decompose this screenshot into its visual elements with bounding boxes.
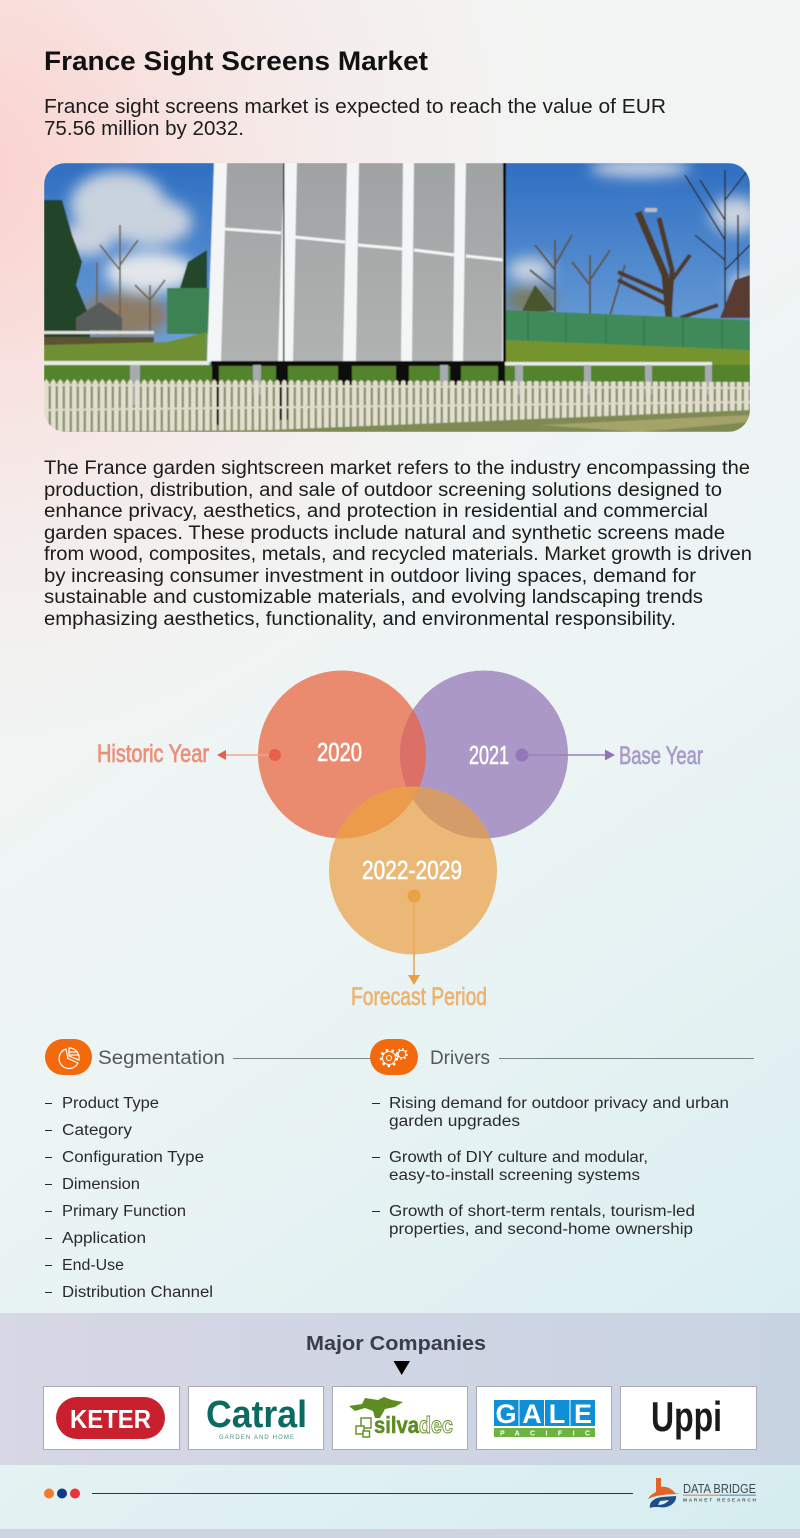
logo: Keter: KETER bbox=[70, 1404, 151, 1434]
forecast period callout bbox=[351, 890, 487, 1011]
drivers list: easy-to-install screening systems bbox=[389, 1167, 640, 1184]
description paragraph: The France garden sightscreen market refers to the industry encompassing the bbox=[44, 458, 750, 479]
logo: Catral: Catral bbox=[206, 1394, 307, 1436]
logo: Data Bridge Market Research: DATA BRIDGE bbox=[683, 1481, 756, 1496]
segmentation list bbox=[45, 1095, 213, 1301]
logo: Silvadec: dec bbox=[419, 1412, 453, 1438]
icon: gears bbox=[370, 1039, 418, 1075]
description paragraph: from wood, composites, metals, and recycled materials. Market growth is driven bbox=[44, 544, 752, 565]
logo: Gale Pacific: PACIFIC bbox=[500, 1430, 590, 1438]
description paragraph: sustainable and customizable materials, and evolving landscaping trends bbox=[44, 587, 703, 608]
drivers list: Rising demand for outdoor privacy and urban bbox=[389, 1095, 729, 1112]
segmentation list: Primary Function bbox=[62, 1203, 186, 1220]
segmentation list: Configuration Type bbox=[62, 1149, 204, 1166]
logo: Catral: GARDEN AND HOME bbox=[219, 1435, 294, 1441]
logo: Gale Pacific bbox=[476, 1386, 612, 1450]
venn diagram: timeline bbox=[97, 670, 703, 1011]
segmentation heading: Segmentation bbox=[98, 1048, 225, 1069]
logo: Gale Pacific: A bbox=[522, 1399, 542, 1429]
logo: Catral bbox=[188, 1386, 324, 1450]
year 2021: 2021 bbox=[469, 740, 509, 770]
description paragraph: garden spaces. These products include natural and synthetic screens made bbox=[44, 523, 725, 544]
drivers heading bbox=[370, 1039, 754, 1075]
base year callout: Base Year bbox=[619, 742, 703, 770]
logo: Data Bridge Market Research bbox=[648, 1478, 757, 1508]
logo: Uppi: Uppi bbox=[651, 1393, 722, 1440]
photo: sight screen on a sports ground bbox=[44, 159, 760, 432]
logo: Silvadec bbox=[332, 1386, 468, 1450]
logo: Gale Pacific: L bbox=[549, 1399, 565, 1429]
drivers list: Growth of short-term rentals, tourism-led bbox=[389, 1203, 695, 1220]
left trees bbox=[44, 200, 90, 345]
ground bbox=[63, 409, 750, 432]
base year callout bbox=[516, 742, 703, 770]
logo: Gale Pacific: G bbox=[495, 1399, 517, 1429]
logo: Data Bridge Market Research: MARKET RESEARCH bbox=[683, 1498, 757, 1504]
drivers list: garden upgrades bbox=[389, 1113, 520, 1130]
logo: Keter bbox=[44, 1386, 180, 1450]
footer bbox=[0, 1478, 800, 1538]
segmentation list: End-Use bbox=[62, 1257, 124, 1274]
right bare trees bbox=[530, 235, 625, 315]
forecast period callout: Forecast Period bbox=[351, 983, 487, 1011]
major companies heading: Major Companies bbox=[306, 1333, 486, 1355]
panel: major companies bbox=[0, 1313, 800, 1465]
description paragraph: emphasizing aesthetics, functionality, and environmental responsibility. bbox=[44, 609, 676, 630]
footer dots bbox=[44, 1488, 80, 1498]
drivers list: Growth of DIY culture and modular, bbox=[389, 1149, 648, 1166]
historic year callout: Historic Year bbox=[97, 740, 209, 768]
drivers heading: Drivers bbox=[430, 1048, 490, 1069]
segmentation list: Dimension bbox=[62, 1176, 140, 1193]
screen frame bbox=[207, 163, 505, 362]
logo: Gale Pacific: E bbox=[574, 1399, 592, 1429]
subtitle bbox=[44, 96, 666, 140]
drivers list: properties, and second-home ownership bbox=[389, 1221, 693, 1238]
subtitle: 75.56 million by 2032. bbox=[44, 118, 244, 140]
segmentation list: Distribution Channel bbox=[62, 1284, 213, 1301]
segmentation list: Product Type bbox=[62, 1095, 159, 1112]
logo: Silvadec: silva bbox=[374, 1412, 419, 1438]
arrow: down bbox=[394, 1361, 410, 1375]
green fence right bbox=[505, 310, 750, 352]
drivers list bbox=[372, 1095, 729, 1238]
segmentation list: Application bbox=[62, 1230, 146, 1247]
segmentation list: Category bbox=[62, 1122, 132, 1139]
segmentation heading bbox=[45, 1039, 372, 1075]
description paragraph bbox=[44, 458, 752, 630]
year 2020: 2020 bbox=[317, 737, 362, 767]
subtitle: France sight screens market is expected to reach the value of EUR bbox=[44, 96, 666, 118]
description paragraph: by increasing consumer investment in outdoor living spaces, demand for bbox=[44, 566, 697, 587]
picket fence bbox=[44, 379, 750, 432]
base bbox=[211, 361, 506, 366]
logo: Uppi bbox=[620, 1386, 756, 1450]
icon: pie chart bbox=[45, 1039, 92, 1075]
rail bbox=[44, 361, 209, 365]
description paragraph: production, distribution, and sale of outdoor screening solutions designed to bbox=[44, 480, 722, 501]
grass bbox=[44, 332, 208, 362]
forecast years: 2022-2029 bbox=[362, 855, 462, 885]
description paragraph: enhance privacy, aesthetics, and protection in residential and commercial bbox=[44, 501, 708, 522]
title: France Sight Screens Market bbox=[44, 46, 428, 76]
